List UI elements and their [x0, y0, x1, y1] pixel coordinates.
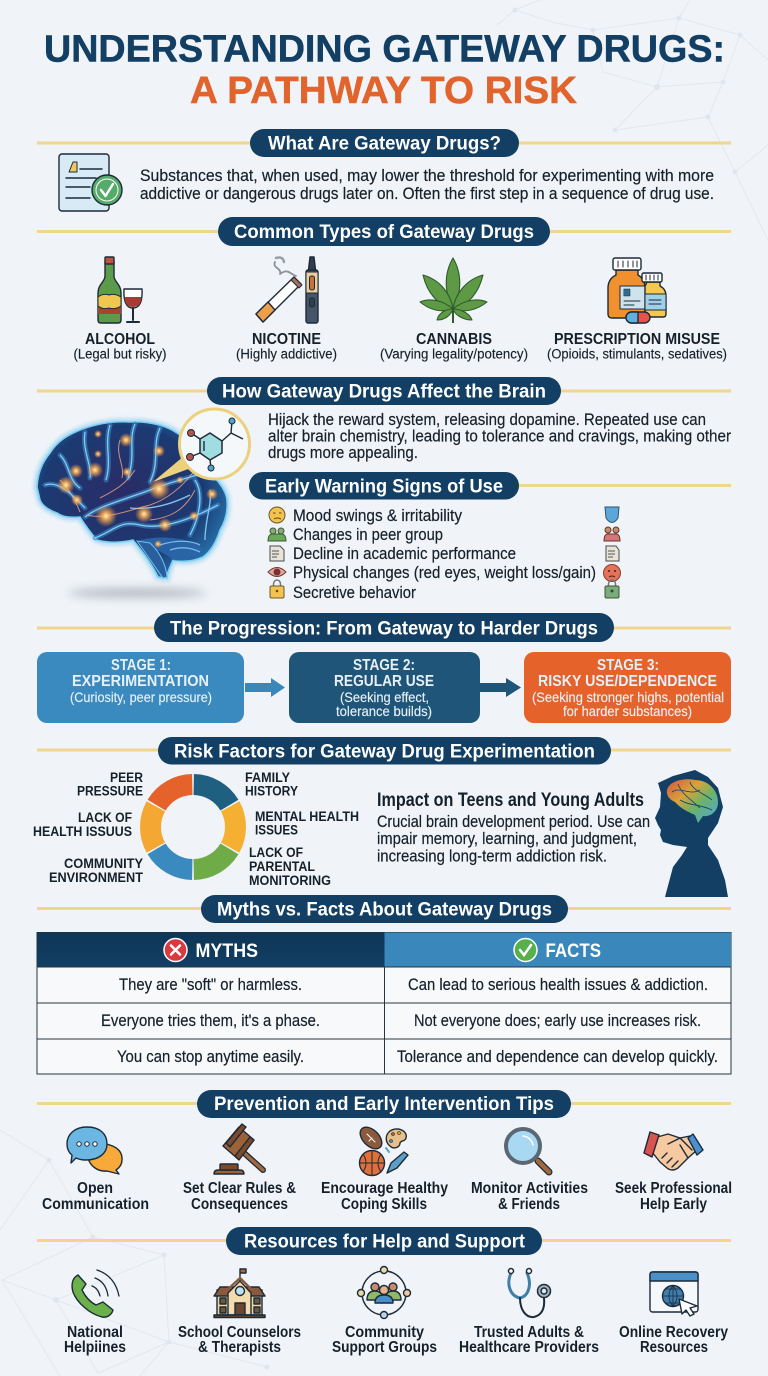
icon: speech bubbles: [67, 1127, 122, 1174]
donut labels: COMMUNITY: [64, 856, 143, 872]
heading: Resources: Resources for Help and Support: [244, 1230, 525, 1252]
list: warning signs: [268, 506, 620, 602]
illustration: glowing brain with molecule: [37, 409, 250, 597]
donut labels: ENVIRONMENT: [49, 870, 143, 886]
icon: stethoscope: [508, 1268, 550, 1317]
label: Resources: [640, 1339, 708, 1356]
donut labels: PARENTAL: [249, 859, 315, 875]
panel: alcohol: [74, 257, 166, 362]
label: Monitor Activities: [471, 1180, 588, 1197]
text block: definition: Substances that, when used, may lower the threshold for experimenting with more: [140, 166, 714, 185]
sublabel: (Varying legality/potency): [380, 346, 528, 362]
donut labels: HEALTH ISSUUS: [33, 824, 132, 840]
donut labels: ISSUES: [255, 822, 298, 838]
stage 3: for harder substances): [563, 703, 692, 719]
stage 2: REGULAR USE: [334, 673, 434, 690]
heading: Prevention: [37, 1090, 731, 1118]
label: NICOTINE: [252, 331, 321, 348]
label: Help Early: [640, 1196, 707, 1213]
stage 1: STAGE 1:: [111, 657, 171, 674]
label: [615, 1180, 732, 1213]
icon: browser and globe: [650, 1272, 698, 1316]
title: UNDERSTANDING GATEWAY DRUGS:: [44, 28, 725, 70]
label: & Friends: [498, 1196, 560, 1213]
label: [619, 1324, 728, 1356]
stage 3: (Seeking stronger highs, potential: [532, 689, 724, 705]
donut labels: HISTORY: [245, 784, 298, 800]
heading: Prevention: Prevention and Early Intervention Tips: [214, 1093, 554, 1115]
stage 3: [524, 652, 731, 723]
resource: community support: [332, 1266, 437, 1356]
label: Support Groups: [332, 1339, 437, 1356]
tip: open communication: [42, 1127, 149, 1213]
stage 3: RISKY USE/DEPENDENCE: [538, 673, 717, 690]
donut labels: LACK OF: [249, 845, 303, 861]
stage 2: tolerance builds): [336, 703, 432, 719]
arrow: stage 1 to 2: [245, 678, 285, 697]
tip: monitor activities: [471, 1129, 588, 1213]
heading: Early Warning Signs of Use: Early Warning Signs of Use: [265, 476, 503, 498]
label: [42, 1180, 149, 1213]
donut labels: MONITORING: [249, 873, 331, 889]
label: [321, 1180, 448, 1213]
heading: Early Warning Signs of Use: [249, 472, 731, 500]
text block: impact on teens: Impact on Teens and Young Adults: [377, 789, 644, 811]
resource: school counselors: [178, 1269, 301, 1356]
donut chart: risk factors: [135, 769, 251, 885]
stage 2: [289, 652, 480, 723]
heading: What Are Gateway Drugs?: What Are Gateway Drugs?: [268, 132, 501, 154]
resource: trusted adults: [459, 1268, 599, 1356]
label: CANNABIS: [416, 331, 492, 348]
label: School Counselors: [178, 1324, 301, 1341]
icon: cigarette and vape: [256, 257, 318, 323]
label: Helpiines: [64, 1339, 126, 1356]
icon: people circle: [358, 1266, 410, 1318]
item: secretive behavior: [270, 580, 619, 602]
donut labels: [33, 770, 359, 889]
label: Set Clear Rules &: [183, 1180, 296, 1197]
label: [459, 1324, 599, 1356]
text block: brain effects: drugs more appealing.: [268, 443, 418, 462]
stage 2: (Seeking effect,: [340, 689, 429, 705]
label: [178, 1324, 301, 1356]
icon: wine bottle and glass: [98, 257, 142, 323]
text block: brain effects: alter brain chemistry, leading to tolerance and cravings, making other: [268, 426, 731, 446]
sublabel: (Opioids, stimulants, sedatives): [547, 346, 727, 362]
tip: seek professional help: [615, 1132, 732, 1213]
heading: Resources: [37, 1227, 731, 1255]
icon: pill bottles: [608, 258, 666, 323]
text block: definition: [140, 166, 714, 203]
heading: How Gateway Drugs Affect the Brain: [37, 377, 731, 405]
heading: What Are Gateway Drugs?: [37, 129, 731, 157]
icon: phone: [72, 1270, 119, 1317]
table: myths vs facts: Not everyone does; early use increases risk.: [414, 1011, 701, 1030]
icon: school building: [214, 1269, 265, 1318]
title: [44, 28, 725, 112]
heading: Myths vs. Facts: Myths vs. Facts About Gateway Drugs: [217, 898, 552, 920]
text block: definition: addictive or dangerous drugs later on. Often the first step in a sequence of drug use.: [140, 184, 714, 203]
item: physical changes: Physical changes (red eyes, weight loss/gain): [293, 563, 596, 582]
label: Coping Skills: [341, 1196, 427, 1213]
icon: handshake: [644, 1132, 703, 1170]
resource: national helplines: [64, 1270, 126, 1356]
heading: The Progression: The Progression: From Gateway to Harder Drugs: [170, 618, 598, 640]
icon: magnifying glass: [506, 1129, 549, 1172]
text block: impact on teens: [377, 789, 650, 866]
heading: How Gateway Drugs Affect the Brain: How Gateway Drugs Affect the Brain: [222, 380, 546, 402]
icon: sports and art: [356, 1123, 408, 1176]
icon: cannabis leaf: [420, 258, 487, 323]
label: [183, 1180, 296, 1213]
donut labels: PEER: [110, 770, 143, 786]
arrow: stage 2 to 3: [480, 678, 521, 697]
donut labels: MENTAL HEALTH: [255, 809, 359, 825]
text block: brain effects: Hijack the reward system, releasing dopamine. Repeated use can: [268, 410, 706, 429]
panel: nicotine: [236, 257, 337, 362]
stage 3: STAGE 3:: [597, 657, 659, 674]
facts header: [384, 932, 731, 967]
table: myths vs facts: Everyone tries them, it's a phase.: [101, 1011, 320, 1030]
label: [64, 1324, 126, 1356]
item: secretive behavior: Secretive behavior: [293, 583, 416, 602]
stage 1: EXPERIMENTATION: [72, 673, 209, 690]
label: National: [67, 1324, 123, 1341]
donut labels: PRESSURE: [77, 784, 143, 800]
brain: [37, 422, 227, 578]
table: myths vs facts: Tolerance and dependence can develop quickly.: [397, 1047, 718, 1066]
icon: head silhouette with brain: [655, 770, 728, 897]
label: ALCOHOL: [85, 331, 155, 348]
text block: impact on teens: Crucial brain development period. Use can: [377, 812, 650, 831]
donut labels: FAMILY: [245, 770, 290, 786]
icon: checklist document: [59, 154, 122, 211]
table: myths vs facts: They are "soft" or harmless.: [119, 975, 302, 994]
stage 1: (Curiosity, peer pressure): [70, 689, 212, 705]
sublabel: (Highly addictive): [236, 346, 337, 362]
icon: gavel: [214, 1124, 263, 1174]
heading: Common Types of Gateway Drugs: [37, 217, 731, 246]
label: & Therapists: [198, 1339, 281, 1356]
text block: brain effects: [268, 410, 731, 462]
label: Trusted Adults &: [474, 1324, 584, 1341]
label: Healthcare Providers: [459, 1339, 599, 1356]
item: academic decline: Decline in academic performance: [293, 544, 516, 563]
item: mood swings: [269, 506, 619, 525]
label: Open: [77, 1180, 113, 1197]
myths header: [37, 932, 384, 967]
tip: set clear rules: [183, 1124, 296, 1213]
tip: healthy coping: [321, 1123, 448, 1213]
label: Community: [345, 1324, 424, 1341]
item: mood swings: Mood swings & irritability: [293, 506, 463, 525]
heading: Risk Factors: Risk Factors for Gateway Drug Experimentation: [174, 740, 595, 762]
stage 1: [37, 652, 244, 723]
heading: The Progression: [37, 613, 731, 642]
resource: online recovery: [619, 1272, 728, 1356]
label: Encourage Healthy: [321, 1180, 448, 1197]
shadow: [67, 589, 207, 597]
title: A PATHWAY TO RISK: [190, 70, 578, 112]
label: Communication: [42, 1196, 149, 1213]
panel: cannabis: [380, 258, 528, 362]
label: Consequences: [191, 1196, 288, 1213]
label: Seek Professional: [615, 1180, 732, 1197]
heading: Risk Factors: [37, 737, 731, 764]
label: [471, 1180, 588, 1213]
text block: impact on teens: increasing long-term addiction risk.: [377, 846, 607, 866]
sublabel: (Legal but risky): [74, 346, 166, 362]
table: myths vs facts: Can lead to serious health issues & addiction.: [408, 975, 708, 994]
item: peer group: Changes in peer group: [293, 525, 443, 544]
table: myths vs facts: You can stop anytime easily.: [117, 1047, 304, 1066]
stage 2: STAGE 2:: [353, 657, 415, 674]
myths header: MYTHS: [196, 941, 258, 962]
item: peer group: [268, 525, 620, 544]
label: [332, 1324, 437, 1356]
pointer: [153, 456, 191, 482]
panel: prescription misuse: [547, 258, 727, 362]
table: myths vs facts: [37, 932, 731, 1074]
heading: Myths vs. Facts: [37, 895, 731, 923]
facts header: FACTS: [546, 941, 601, 962]
donut labels: LACK OF: [78, 810, 132, 826]
label: PRESCRIPTION MISUSE: [554, 331, 720, 348]
heading: Common Types of Gateway Drugs: Common Types of Gateway Drugs: [234, 221, 534, 243]
label: Online Recovery: [619, 1324, 728, 1341]
molecule callout: [180, 409, 250, 479]
text block: impact on teens: impair memory, learning, and judgment,: [377, 829, 637, 848]
